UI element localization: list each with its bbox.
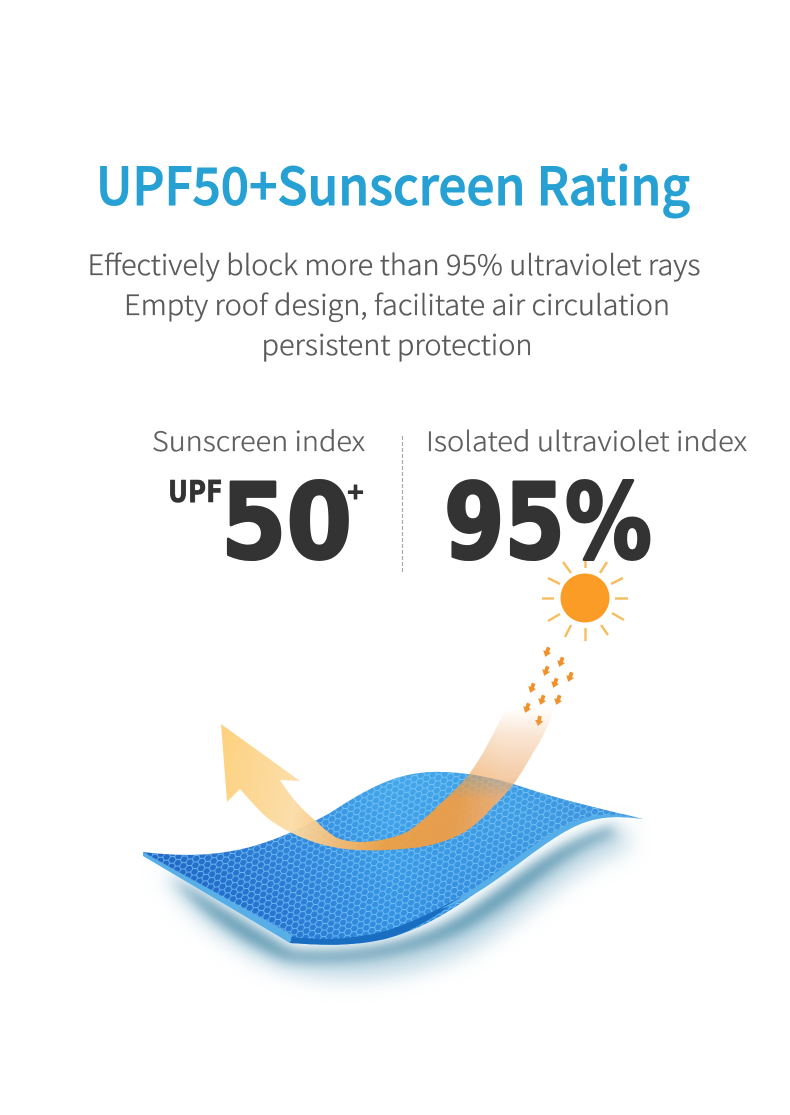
stat label: isolated ultraviolet index: Isolated ultraviolet index <box>426 420 747 459</box>
icon: sun <box>542 561 628 641</box>
fabric sheet <box>143 772 643 945</box>
stat label: sunscreen index: Sunscreen index <box>152 420 365 459</box>
sheet lower edge <box>290 896 462 945</box>
stat value: UPF 50+: + <box>346 480 365 505</box>
stat value: 95%: 95% <box>444 461 652 583</box>
stat value: UPF 50+: 50 <box>221 461 352 583</box>
icon: small UV arrows <box>521 646 576 727</box>
title: UPF50+Sunscreen Rating <box>96 145 690 220</box>
stat value: UPF 50+: UPF <box>168 475 223 510</box>
stat: isolated ultraviolet index <box>426 420 747 583</box>
description text <box>88 244 700 364</box>
stat: sunscreen index <box>152 420 365 583</box>
sheet surface <box>143 772 643 945</box>
description text: Effectively block more than 95% ultraviolet rays <box>88 244 700 284</box>
arrow: reflected UV <box>221 708 555 850</box>
description text: persistent protection <box>262 324 532 364</box>
description text: Empty roof design, facilitate air circulation <box>124 284 670 324</box>
fabric shadow <box>160 826 630 978</box>
sheet front edge <box>143 852 292 943</box>
